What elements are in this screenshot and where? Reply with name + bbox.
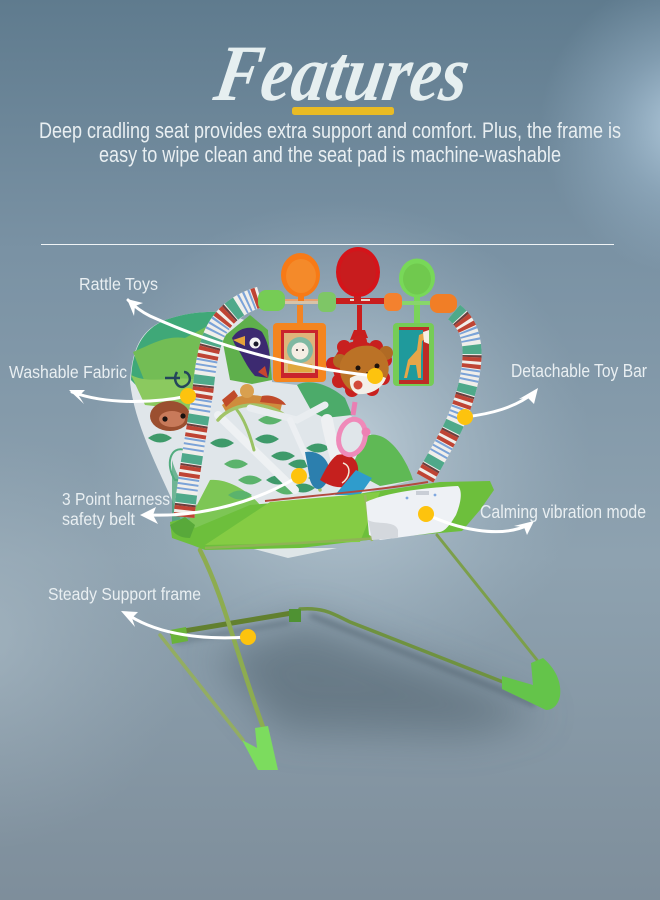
foot: front — [242, 726, 278, 770]
marker — [457, 409, 473, 425]
bead: left end green — [258, 290, 285, 311]
green disc — [399, 258, 435, 301]
vine loop — [165, 372, 190, 387]
intro text: easy to wipe clean and the seat pad is machine-washable — [99, 142, 561, 167]
left arch — [184, 297, 260, 517]
parrot — [232, 328, 270, 378]
lion toy — [326, 305, 393, 397]
arrow: washable fabric — [69, 388, 196, 404]
arrow: detachable toy bar — [457, 388, 538, 425]
bouncer frame — [160, 535, 560, 770]
marker — [180, 388, 196, 404]
marker — [240, 629, 256, 645]
foot: rear right — [502, 658, 560, 710]
toy card: lion — [273, 305, 326, 382]
toy bar — [258, 290, 457, 313]
connector: frame left — [170, 627, 188, 644]
title: Features — [208, 30, 476, 118]
leaf panels — [222, 315, 272, 384]
harness belt — [218, 405, 345, 490]
giraffe and toucan — [222, 384, 286, 412]
orange disc — [281, 253, 320, 301]
arrow: harness — [140, 468, 307, 524]
label: harness: safety belt — [62, 509, 135, 529]
monkey — [150, 401, 190, 431]
floor shadow — [175, 615, 545, 735]
right arch — [425, 312, 472, 478]
pink ring toy — [335, 402, 370, 458]
marker — [367, 368, 383, 384]
label: steady support: Steady Support frame — [48, 584, 201, 604]
seat underside — [250, 548, 337, 558]
label: washable fabric: Washable Fabric — [9, 362, 127, 382]
divider line — [41, 244, 614, 245]
label: harness — [62, 489, 170, 529]
arrow: rattle toys — [127, 299, 383, 384]
bead: right end orange — [430, 294, 457, 313]
connector: frame right — [289, 609, 301, 622]
toy card: giraffe — [393, 305, 434, 386]
leaves pattern — [148, 434, 330, 492]
green corner panel — [131, 312, 225, 400]
arrow: steady support — [121, 611, 256, 645]
seat pan front — [170, 481, 494, 550]
red disc — [336, 247, 380, 301]
arrow: calming vibration — [418, 506, 534, 535]
toy ball and lion print — [305, 452, 372, 495]
title underline — [292, 107, 394, 115]
bead: green — [318, 292, 336, 312]
intro text — [39, 118, 621, 167]
label: rattle toys: Rattle Toys — [79, 274, 158, 294]
label: harness: 3 Point harness — [62, 489, 170, 509]
seat back — [130, 312, 413, 530]
bead: orange — [384, 293, 402, 311]
marker — [418, 506, 434, 522]
marker — [291, 468, 307, 484]
vibration unit — [366, 486, 461, 540]
